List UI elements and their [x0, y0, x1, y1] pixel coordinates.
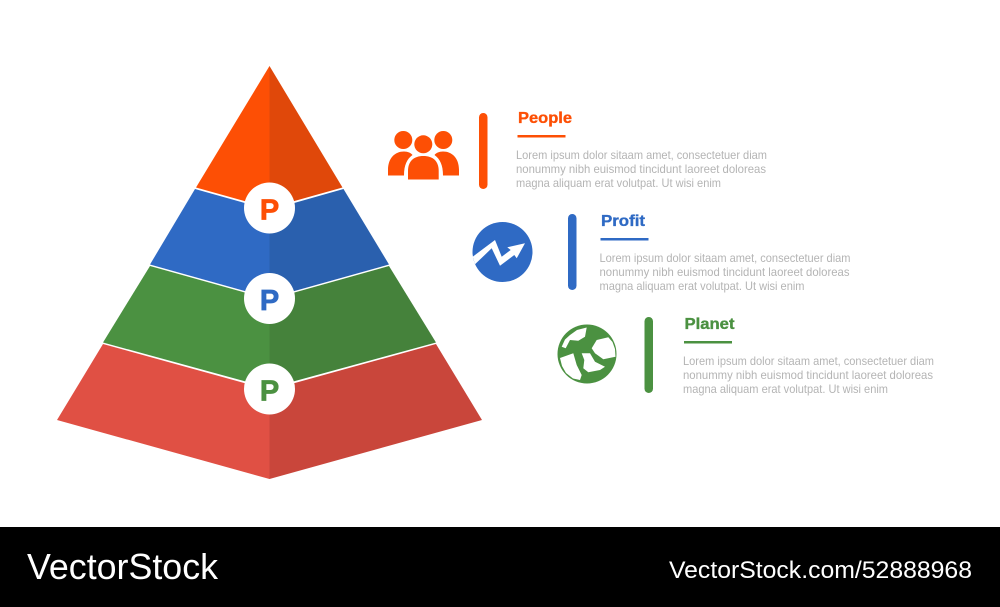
icon: planet globe [558, 324, 616, 384]
text block: profit [600, 251, 851, 293]
text block: planet: Lorem ipsum dolor sitaam amet, consectetuer diam [683, 354, 934, 368]
text block: people: nonummy nibh euismod tincidunt laoreet doloreas [516, 162, 766, 176]
text block: profit: nonummy nibh euismod tincidunt laoreet doloreas [600, 265, 850, 279]
badge: green P: P [260, 376, 279, 408]
accent bar: profit [568, 214, 576, 290]
accent bar: planet [644, 317, 653, 393]
icon: people group [388, 131, 459, 180]
text block: people: Lorem ipsum dolor sitaam amet, consectetuer diam [516, 148, 767, 162]
underline: people [518, 135, 566, 138]
pyramid layer: blue [150, 189, 389, 298]
heading: People: People [518, 110, 572, 127]
heading: Profit: Profit [601, 213, 645, 230]
heading: Planet: Planet [684, 316, 734, 333]
text block: profit: Lorem ipsum dolor sitaam amet, consectetuer diam [600, 251, 851, 265]
badge: blue P: P [260, 285, 279, 317]
footer logo text: VectorStock [27, 546, 219, 587]
text block: planet: nonummy nibh euismod tincidunt laoreet doloreas [683, 368, 933, 382]
underline: planet [684, 341, 732, 344]
badge: green P [244, 364, 295, 414]
text block: profit: magna aliquam erat volutpat. Ut wisi enim [600, 279, 805, 293]
pyramid layer: green [103, 266, 436, 388]
text block: planet [683, 354, 934, 396]
text block: people [516, 148, 767, 190]
badge: blue P [244, 273, 295, 324]
pyramid layer: top orange [196, 66, 342, 208]
footer url text: VectorStock.com/52888968 [669, 557, 972, 584]
badge: orange P [244, 182, 295, 234]
text block: planet: magna aliquam erat volutpat. Ut wisi enim [683, 382, 888, 396]
underline: profit [600, 238, 648, 240]
footer band [0, 527, 1000, 607]
text block: people: magna aliquam erat volutpat. Ut wisi enim [516, 176, 721, 190]
pyramid layer: red [57, 344, 482, 479]
badge: orange P: P [260, 194, 279, 226]
pyramid chart [57, 66, 482, 479]
accent bar: people [479, 113, 488, 189]
icon: profit arrow [472, 222, 532, 282]
